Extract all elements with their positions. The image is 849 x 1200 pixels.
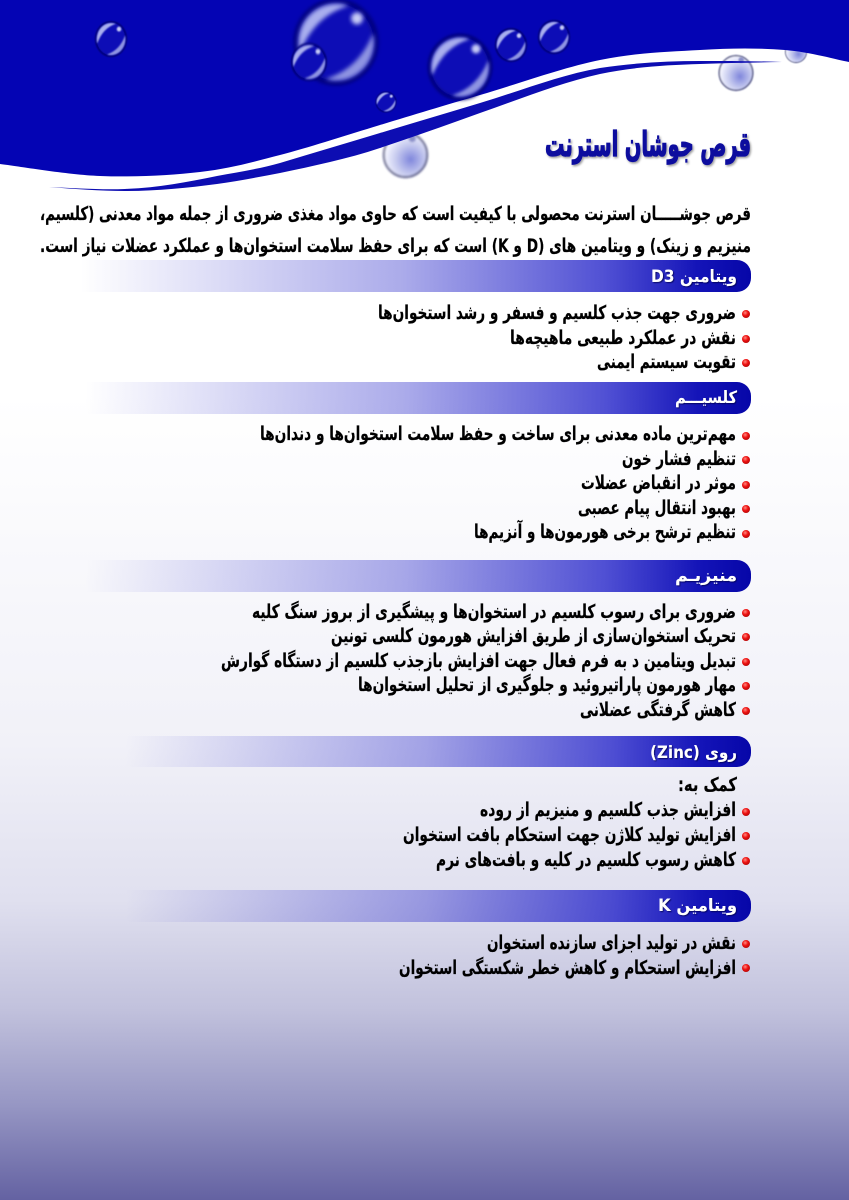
header wave [0, 0, 849, 176]
heading bar: zinc [125, 736, 751, 767]
bullets: calcium: بهبود انتقال پیام عصبی [578, 497, 736, 519]
bullets: magnesium [221, 600, 750, 721]
intro paragraph [40, 203, 751, 257]
heading bar: vitamin K [125, 890, 751, 922]
heading bar: magnesium: منیزیـم [675, 566, 737, 586]
bullets: zinc: افزایش جذب کلسیم و منیزیم از روده [480, 799, 736, 821]
bullets: zinc: کاهش رسوب کلسیم در کلیه و بافت‌های نرم [436, 849, 737, 871]
heading bar: vitamin K: ویتامین K [658, 896, 737, 916]
intro paragraph: منیزیم و زینک) و ویتامین های (D و K) است که برای حفظ سلامت استخوان‌ها و عملکرد عضلات نیاز است. [40, 235, 751, 257]
bullets: calcium: تنظیم ترشح برخی هورمون‌ها و آنزیم‌ها [474, 519, 736, 543]
bullets: vitamin K: نقش در تولید اجزای سازنده استخوان [487, 932, 736, 954]
bullets: vitamin D3: تقویت سیستم ایمنی [597, 351, 736, 373]
bullets: calcium: موثر در انقباض عضلات [581, 472, 736, 494]
swoosh under the wave [49, 61, 782, 191]
heading bar: vitamin D3: ویتامین D3 [651, 267, 737, 287]
bullets: magnesium: کاهش گرفتگی عضلانی [580, 698, 737, 721]
panel: vitamin K [125, 890, 751, 979]
bullets: vitamin K [399, 932, 750, 979]
panel: zinc [125, 736, 751, 871]
bullets: zinc: کمک به: [678, 774, 738, 796]
bullets: calcium: تنظیم فشار خون [622, 448, 736, 470]
dark bubbles on the wave [96, 1, 569, 112]
heading bar: magnesium [85, 560, 751, 592]
heading bar: zinc: روی (Zinc) [650, 743, 737, 763]
bullets: vitamin D3: نقش در عملکرد طبیعی ماهیچه‌ها [510, 327, 736, 349]
heading bar: vitamin D3 [80, 260, 751, 292]
heading bar: calcium [85, 382, 751, 414]
bullets: zinc [403, 774, 750, 871]
heading bar: calcium: کلسیـــم [675, 388, 737, 408]
bullets: vitamin D3 [378, 302, 750, 373]
panel: calcium [85, 382, 751, 543]
light bubbles on white area [384, 41, 807, 177]
panel: vitamin D3 [80, 260, 751, 373]
bullets: calcium [260, 423, 750, 543]
panel: magnesium [85, 560, 751, 721]
